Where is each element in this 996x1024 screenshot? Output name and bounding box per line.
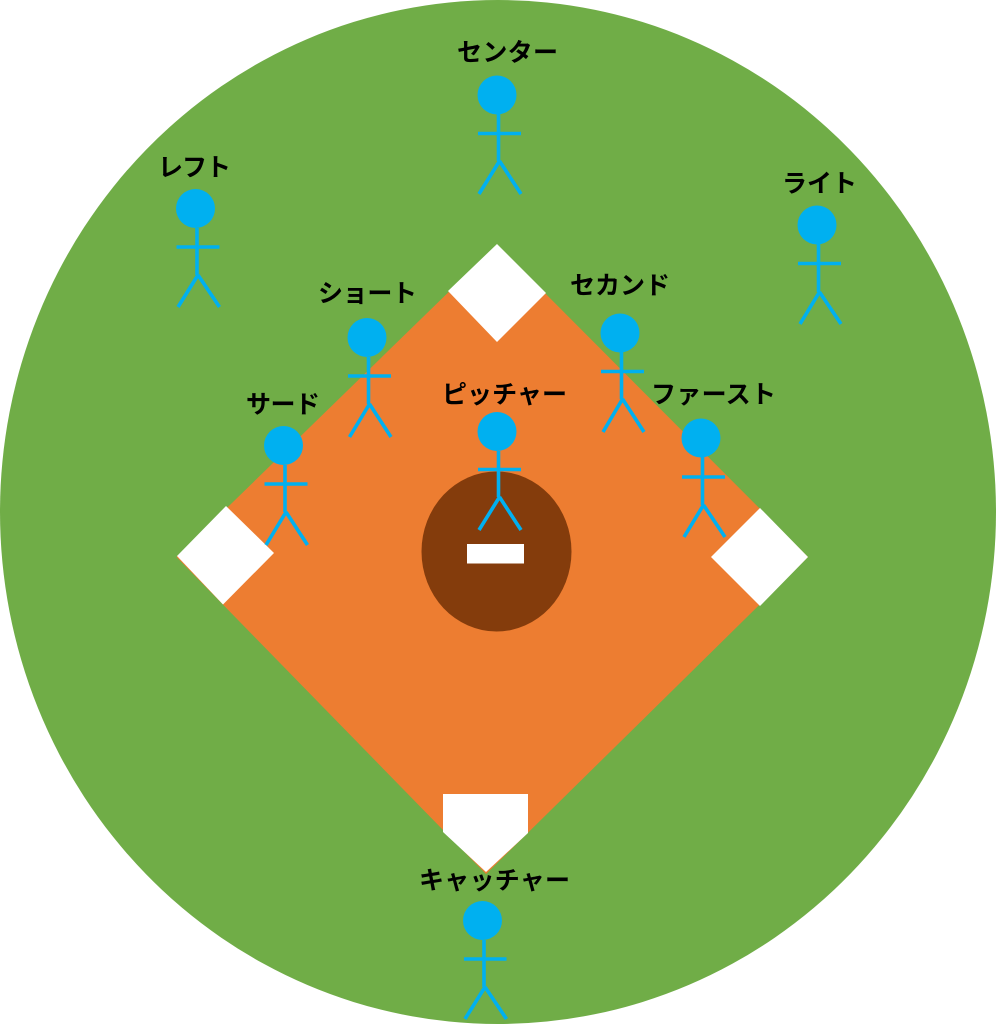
player: third baseman [246, 391, 320, 545]
player: catcher [419, 867, 570, 1019]
player: second baseman [570, 272, 670, 432]
player: pitcher: ピッチャー [442, 381, 567, 409]
player: catcher: キャッチャー [419, 867, 570, 895]
player: shortstop [318, 280, 417, 437]
pitcher's plate [467, 544, 524, 564]
player: right: ライト [782, 170, 857, 198]
third base [177, 506, 274, 604]
player: second baseman: セカンド [570, 272, 670, 300]
player: center: センター [457, 39, 558, 67]
player: shortstop: ショート [318, 280, 417, 308]
player: left: レフト [158, 154, 231, 182]
player: first baseman [651, 381, 776, 537]
player: left [158, 154, 231, 307]
player: center [457, 39, 558, 194]
home plate [443, 794, 528, 872]
second base [448, 244, 546, 342]
infield diamond [176, 245, 808, 874]
pitcher's mound [422, 472, 572, 632]
first base [711, 508, 808, 606]
player: right [782, 170, 857, 324]
player: pitcher [442, 381, 567, 530]
player: first baseman: ファースト [651, 381, 776, 409]
player: third baseman: サード [246, 391, 320, 419]
